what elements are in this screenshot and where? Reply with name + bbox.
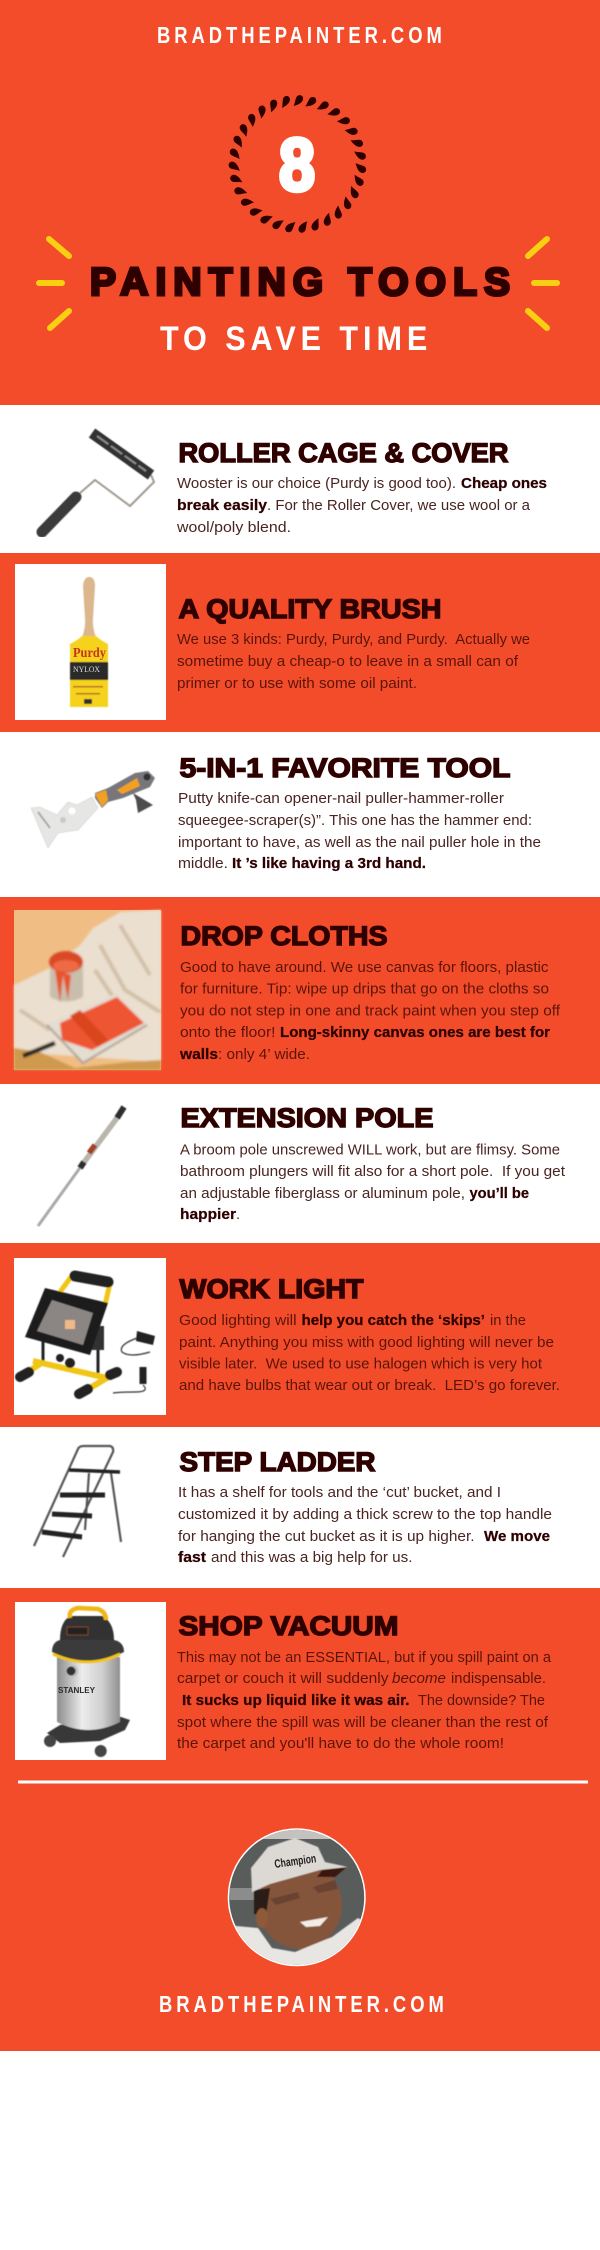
body text: wool/poly blend. — [176, 520, 291, 536]
icon: ring of drops — [228, 95, 366, 233]
body text: squeegee-scraper(s)”. This one has the hammer end: — [178, 813, 532, 829]
body text: you’ll be — [470, 1186, 529, 1202]
icon: 5-in-1 tool — [31, 771, 155, 848]
body text — [180, 1142, 565, 1223]
divider line — [18, 1780, 588, 1784]
body text: sometime buy a cheap-o to leave in a small can of — [177, 654, 519, 670]
icon: extension pole — [38, 1107, 124, 1226]
body text — [177, 1650, 552, 1752]
body text: and this was a big help for us. — [211, 1550, 412, 1566]
body text — [179, 1313, 560, 1394]
body text: middle. — [178, 856, 228, 872]
body text: . For the Roller Cover, we use wool or a — [267, 498, 531, 514]
body text: an adjustable fiberglass or aluminum pole, — [180, 1186, 465, 1202]
body text: It has a shelf for tools and the ‘cut’ bucket, and I — [178, 1485, 501, 1501]
body text: primer or to use with some oil paint. — [177, 676, 417, 692]
body text: and have bulbs that wear out or break. LED’s go forever. — [179, 1378, 560, 1394]
icon: paint roller — [42, 433, 154, 532]
body text: happier — [180, 1207, 236, 1223]
body text: It ’s like having a 3rd hand. — [232, 856, 426, 872]
body text: important to have, as well as the nail puller hole in the — [178, 835, 541, 851]
panel: roller cage and cover — [0, 405, 600, 553]
body text — [178, 1485, 552, 1566]
heading: STEP LADDER — [180, 1447, 376, 1477]
body text: onto the floor! — [180, 1025, 276, 1041]
body text: : only 4’ wide. — [218, 1047, 310, 1063]
panel: drop cloths — [0, 897, 600, 1084]
icon: yellow rays — [39, 239, 557, 328]
image: brush: Purdy — [73, 646, 106, 661]
body text: Cheap ones — [461, 476, 547, 492]
body text: It sucks up liquid like it was air. — [182, 1693, 410, 1709]
body text — [177, 632, 530, 692]
body text: bathroom plungers will fit also for a short pole. If you get — [180, 1164, 565, 1180]
heading: SHOP VACUUM — [178, 1611, 398, 1641]
body text: help you catch the ‘skips’ — [302, 1313, 485, 1329]
image: drop cloth scene — [14, 910, 161, 1070]
body text — [178, 791, 541, 872]
image: shop vacuum: STANLEY — [58, 1685, 95, 1695]
icon: step ladder — [34, 1446, 121, 1557]
heading: WORK LIGHT — [180, 1274, 364, 1304]
panel: step ladder — [0, 1427, 600, 1588]
body text — [179, 960, 561, 1063]
body text: in the — [490, 1313, 526, 1329]
heading: 5-IN-1 FAVORITE TOOL — [180, 753, 510, 783]
number 8: 8 — [279, 124, 315, 206]
body text: spot where the spill was will be cleaner than the rest of — [177, 1715, 549, 1731]
image: shop vacuum — [15, 1602, 166, 1760]
heading: DROP CLOTHS — [180, 921, 388, 951]
image: portrait: Champion — [273, 1851, 317, 1871]
image: portrait — [225, 1825, 370, 1970]
body text: Good to have around. We use canvas for floors, plastic — [180, 960, 548, 976]
body text: the carpet and you'll have to do the whole room! — [177, 1736, 504, 1752]
panel: quality brush — [0, 553, 600, 732]
body text: . — [236, 1207, 240, 1223]
image: brush — [15, 564, 166, 720]
site name top: BRADTHEPAINTER.COM — [157, 23, 442, 49]
body text — [176, 476, 547, 536]
heading: A QUALITY BRUSH — [178, 594, 442, 624]
body text: walls — [179, 1047, 218, 1063]
body text: carpet or couch it will suddenly — [177, 1671, 389, 1687]
body text: Good lighting will — [179, 1313, 297, 1329]
body text: become — [392, 1671, 446, 1687]
body text: Putty knife-can opener-nail puller-hammer-roller — [178, 791, 504, 807]
body text: Long-skinny canvas ones are best for — [280, 1025, 550, 1041]
subtitle: TO SAVE TIME — [160, 320, 427, 357]
body text: A broom pole unscrewed WILL work, but are flimsy. Some — [180, 1142, 560, 1158]
panel: 5-in-1 tool — [0, 732, 600, 897]
image: work light — [14, 1258, 166, 1415]
body text: paint. Anything you miss with good lighting will never be — [179, 1335, 554, 1351]
body text: The downside? The — [418, 1693, 545, 1709]
body text: Wooster is our choice (Purdy is good too). — [177, 476, 456, 492]
body text: We move — [484, 1529, 550, 1545]
image: brush: NYLOX — [73, 665, 100, 674]
panel: work light — [0, 1243, 600, 1427]
body text: indispensable. — [451, 1671, 546, 1687]
heading: EXTENSION POLE — [180, 1103, 434, 1133]
title: PAINTING TOOLS — [90, 261, 510, 304]
body text: This may not be an ESSENTIAL, but if you spill paint on a — [177, 1650, 552, 1666]
body text: We use 3 kinds: Purdy, Purdy, and Purdy. Actually we — [177, 632, 530, 648]
panel: extension pole — [0, 1084, 600, 1243]
panel: header — [0, 0, 600, 405]
site name footer: BRADTHEPAINTER.COM — [159, 1992, 444, 2018]
body text: break easily — [177, 498, 267, 514]
heading: ROLLER CAGE & COVER — [178, 438, 508, 468]
panel: shop vacuum and footer — [0, 1588, 600, 2051]
body text: you do not step in one and track paint when you step off — [180, 1004, 561, 1020]
body text: for furniture. Tip: wipe up drips that go on the cloths so — [180, 982, 549, 998]
body text: customized it by adding a thick screw to the top handle — [178, 1507, 552, 1523]
body text: visible later. We used to use halogen which is very hot — [179, 1357, 542, 1373]
body text: for hanging the cut bucket as it is up higher. — [178, 1529, 474, 1545]
body text: fast — [178, 1550, 206, 1566]
